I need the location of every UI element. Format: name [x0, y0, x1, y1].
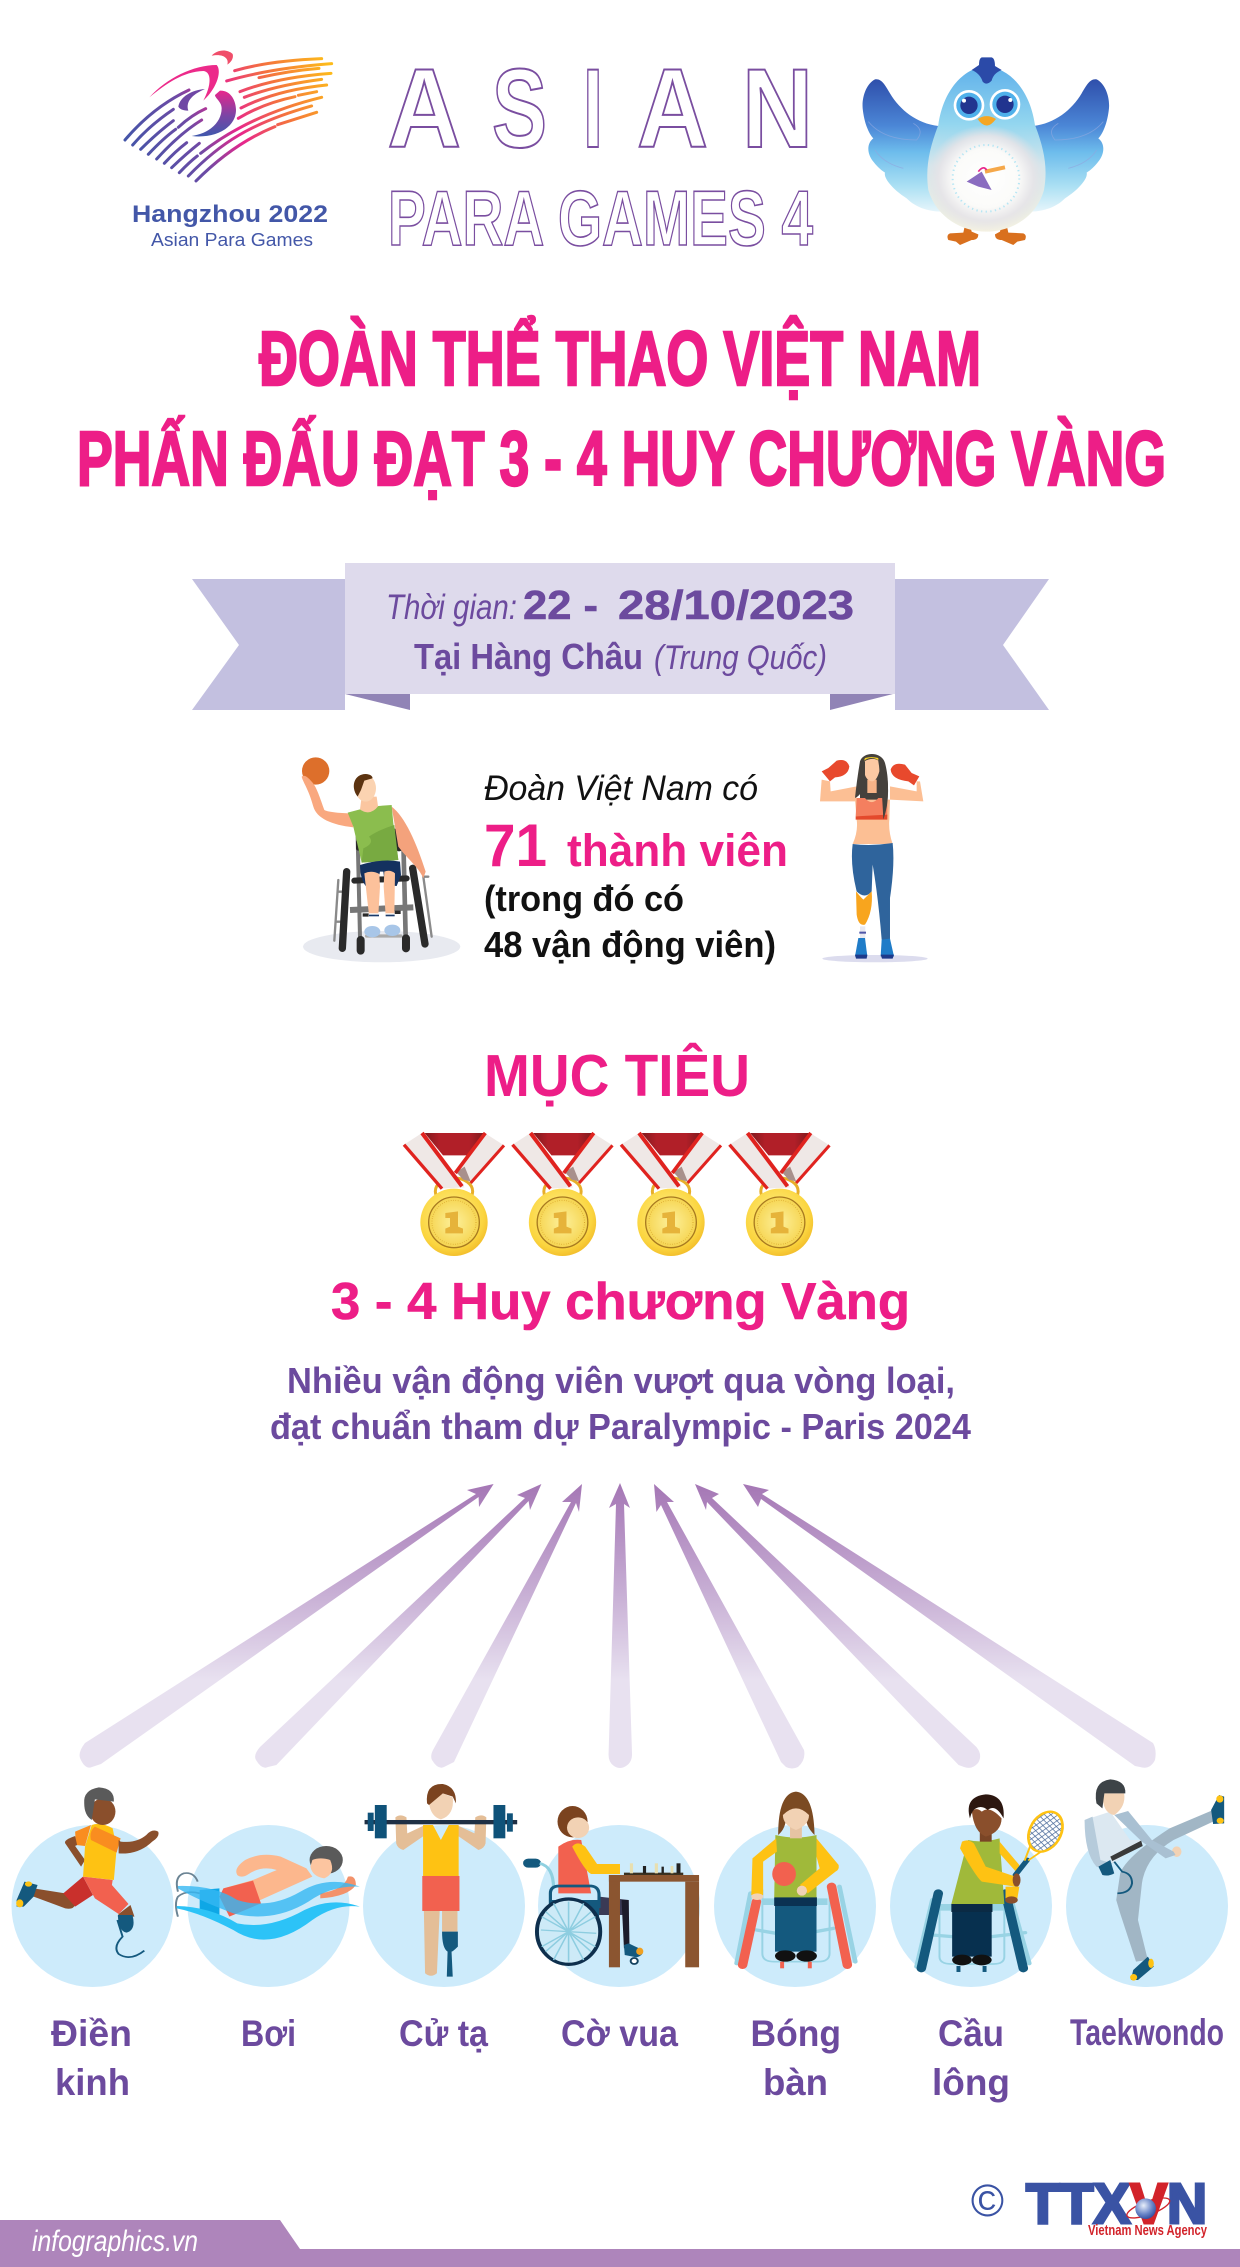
- mascot body: [927, 66, 1046, 232]
- icon: wheelchair table tennis player: [737, 1792, 855, 1968]
- label: Bóng bàn: [750, 2013, 841, 2103]
- mascot crest: [972, 57, 1002, 84]
- sport: athletics (Điền kinh): [12, 1787, 174, 1987]
- goal description: đạt chuẩn tham dự Paralympic - Paris 2024: [270, 1406, 971, 1447]
- logo: Hangzhou 2022 Asian Para Games: Hangzhou 2022: [132, 201, 328, 228]
- heading: MỤC TIÊU: MỤC TIÊU: [484, 1042, 750, 1109]
- sport: badminton (Cầu lông): [890, 1794, 1069, 1987]
- heading: ASIAN: A: [388, 46, 461, 171]
- sport: taekwondo: [1066, 1779, 1228, 1987]
- banner text: time: [386, 582, 854, 628]
- logo: TTXVN Vietnam News Agency: TTXVN: [1026, 2172, 1207, 2236]
- medals row: [404, 1133, 829, 1256]
- label: Cầu lông: [932, 2013, 1010, 2103]
- label: Bơi: Bơi: [241, 2013, 296, 2054]
- sport: weightlifting (Cử tạ): [363, 1784, 525, 1987]
- text: team summary: 71: [484, 812, 547, 879]
- mascot: [863, 57, 1109, 245]
- text: team summary: 48 vận động viên): [484, 924, 776, 965]
- mascot feet: [947, 225, 1026, 245]
- text: team summary: thành viên: [567, 825, 788, 876]
- arrow 6: [695, 1484, 980, 1768]
- heading: ASIAN: A: [637, 46, 708, 171]
- medal 3: [621, 1133, 721, 1256]
- banner text: time: 28/10/2023: [618, 582, 854, 628]
- text: team summary: [484, 769, 788, 965]
- icon: swimmer: [176, 1846, 360, 1940]
- mascot mini logo: [967, 167, 1005, 190]
- label: Bóng bàn: bàn: [763, 2062, 828, 2103]
- arrow 1: [80, 1484, 494, 1768]
- icon: weightlifter: [365, 1784, 517, 1977]
- heading: PARA GAMES 4: PARA GAMES 4: [388, 174, 813, 262]
- ribbon banner: [192, 563, 1049, 710]
- sport: chess (Cờ vua): [523, 1806, 700, 1987]
- icon: taekwondo kicker: [1085, 1779, 1224, 1981]
- heading: ASIAN: I: [583, 46, 603, 171]
- arrow 3: [431, 1484, 582, 1768]
- text: team summary: Đoàn Việt Nam có: [484, 769, 758, 808]
- illustration: wheelchair athlete with ball: [302, 757, 460, 962]
- label: Điền kinh: kinh: [55, 2062, 130, 2103]
- sport: swimming (Bơi): [176, 1825, 360, 1987]
- heading: ASIAN: N: [742, 46, 813, 171]
- footer bar: [0, 2220, 1240, 2267]
- label: Cầu lông: lông: [932, 2062, 1010, 2103]
- arrow 5: [654, 1484, 804, 1768]
- banner text: location: (Trung Quốc): [654, 639, 827, 677]
- sport: table tennis (Bóng bàn): [714, 1792, 876, 1987]
- illustration: female boxer with prosthetic leg: [820, 754, 928, 962]
- medal 1: [404, 1133, 504, 1256]
- medal 4: [729, 1133, 829, 1256]
- banner text: time: 22 -: [523, 582, 598, 628]
- banner text: location: Tại Hàng Châu: [414, 636, 643, 677]
- goal description: [270, 1360, 971, 1447]
- mascot beak: [978, 116, 996, 126]
- goal description: Nhiều vận động viên vượt qua vòng loại,: [287, 1360, 955, 1401]
- medal 2: [512, 1133, 612, 1256]
- label: Cử tạ: Cử tạ: [399, 2013, 488, 2054]
- icon: wheelchair chess player: [523, 1806, 699, 1967]
- arrow 2: [255, 1484, 541, 1768]
- label: Cờ vua: Cờ vua: [561, 2013, 678, 2054]
- logo: Hangzhou 2022 Asian Para Games: Asian Para Games: [151, 230, 313, 250]
- goal text: 3 - 4 Huy chương Vàng: 3 - 4 Huy chương Vàng: [331, 1273, 910, 1331]
- footer text: infographics.vn: infographics.vn: [32, 2225, 198, 2258]
- arrows converging on the goal: [80, 1483, 1156, 1768]
- mascot eyes: [954, 89, 1020, 121]
- arrow 4: [609, 1483, 632, 1768]
- label: Điền kinh: [51, 2013, 132, 2103]
- heading: ASIAN: [388, 46, 813, 171]
- logo: Hangzhou 2022 Asian Para Games: [125, 50, 332, 250]
- mascot wings: [863, 79, 1109, 212]
- label: Bóng bàn: Bóng: [750, 2013, 841, 2054]
- copyright symbol: ©: [971, 2175, 1004, 2226]
- banner text: location: [414, 636, 827, 677]
- arrow 7: [743, 1484, 1156, 1768]
- title: [77, 315, 1166, 502]
- banner text: time: Thời gian:: [386, 588, 517, 627]
- icon: wheelchair badminton player: [917, 1794, 1069, 1972]
- heading: ASIAN: S: [492, 46, 547, 171]
- icon: runner: [16, 1787, 159, 1957]
- label: Điền kinh: Điền: [51, 2013, 132, 2054]
- label: Cầu lông: Cầu: [938, 2013, 1004, 2054]
- text: team summary: (trong đó có: [484, 878, 684, 919]
